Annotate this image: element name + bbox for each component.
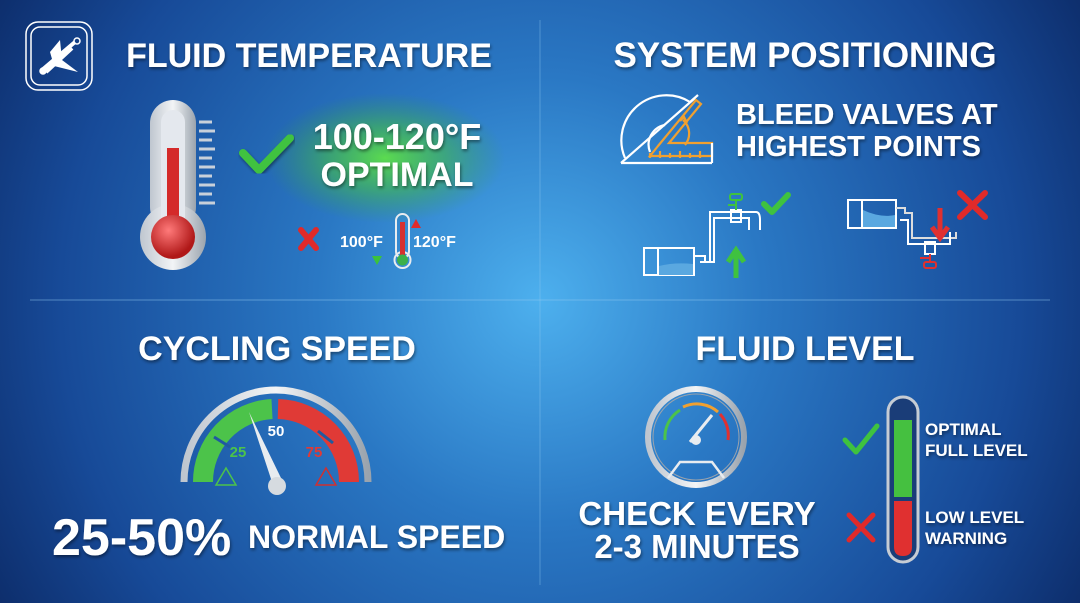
check every text [578,495,816,565]
title: cycling speed: CYCLING SPEED [138,330,416,368]
icon: x level [849,515,873,540]
arrow: down red [932,208,948,238]
optimal range text: OPTIMAL [321,156,473,194]
icon: dial gauge [648,389,744,485]
title: fluid temperature: FLUID TEMPERATURE [126,37,492,75]
out of range indicator: 100°F [340,234,383,251]
chart: fluid level tube [888,397,918,562]
chart: speed gauge: 75 [306,444,322,461]
bleed valves text: BLEED VALVES AT [736,99,998,131]
optimal range text: 100-120°F [313,116,481,157]
optimal range text [313,116,481,194]
icon: protractor [621,95,712,163]
out of range indicator [301,214,456,268]
level labels: WARNING [925,529,1007,548]
normal speed text: 25-50% [52,509,231,567]
normal speed text [52,509,505,567]
chart: speed gauge [184,390,368,495]
diagram: incorrect valve placement [848,200,956,268]
title: fluid level: FLUID LEVEL [695,330,915,368]
icon: check small [764,195,788,212]
out of range indicator: 120°F [413,234,456,251]
level labels: OPTIMAL [925,420,1002,439]
level labels: FULL LEVEL [925,441,1028,460]
check every text: 2-3 MINUTES [594,528,800,565]
icon: large thermometer [140,100,215,270]
chart: speed gauge: 50 [268,423,284,440]
glow [265,93,505,223]
logo [26,22,92,90]
bleed valves text [736,99,998,163]
normal speed text: NORMAL SPEED [248,519,505,555]
arrow: up green [728,250,744,278]
level labels: LOW LEVEL [925,508,1024,527]
icon: x small [960,193,985,217]
chart: speed gauge: 25 [230,444,246,461]
icon: check [243,138,290,170]
level labels [925,420,1028,548]
bleed valves text: HIGHEST POINTS [736,131,981,163]
title: system positioning: SYSTEM POSITIONING [613,36,997,75]
check every text: CHECK EVERY [578,495,816,532]
icon: check level [845,426,877,452]
diagram: correct valve placement [644,194,760,275]
